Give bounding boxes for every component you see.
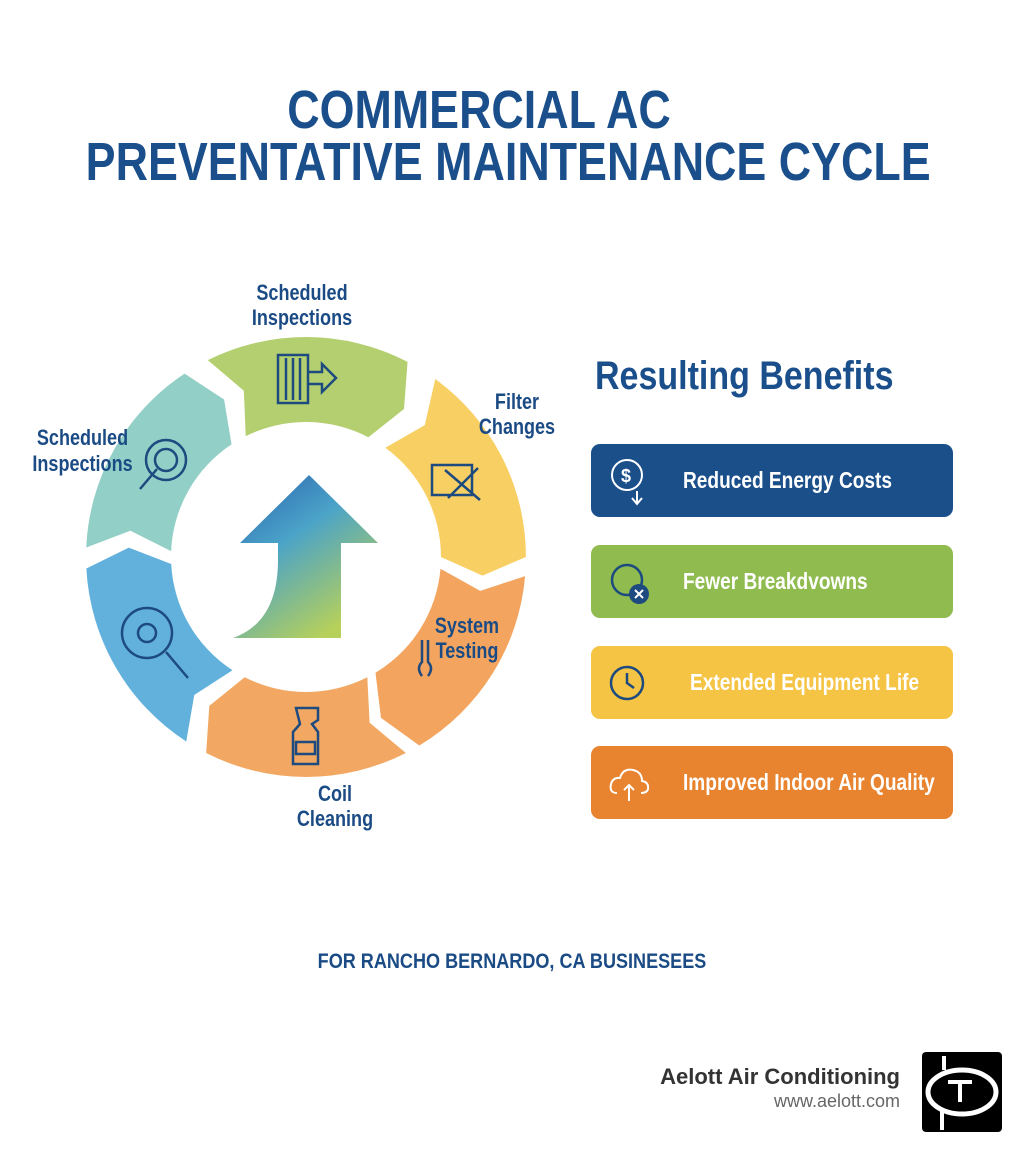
icon: wrench panel bbox=[432, 465, 480, 500]
label: top: Inspections bbox=[252, 305, 352, 330]
benefit: breakdowns: Fewer Breakdvowns bbox=[683, 568, 868, 594]
label: filter bbox=[479, 389, 555, 439]
benefit: life: Extended Equipment Life bbox=[690, 669, 919, 695]
segment: orange right bbox=[353, 535, 547, 758]
label: left: Scheduled bbox=[37, 425, 128, 450]
benefit: air quality bbox=[591, 746, 953, 819]
title bbox=[86, 80, 931, 192]
label: filter: Changes bbox=[479, 414, 555, 439]
segment: orange bottom bbox=[206, 674, 407, 779]
icon: filter bbox=[278, 355, 336, 403]
segment: yellow bbox=[368, 368, 546, 591]
label: top bbox=[252, 280, 352, 330]
benefit: energy bbox=[591, 444, 953, 517]
center arrow bbox=[233, 475, 378, 638]
benefit: breakdowns bbox=[591, 545, 953, 618]
logo bbox=[922, 1052, 1002, 1132]
icon: magnifier gear bbox=[122, 608, 188, 678]
benefit: air quality: Improved Indoor Air Quality bbox=[683, 769, 935, 795]
title: COMMERCIAL AC bbox=[287, 80, 671, 140]
company name: Aelott Air Conditioning bbox=[660, 1064, 900, 1089]
label: left bbox=[32, 425, 133, 476]
label: testing bbox=[435, 613, 499, 663]
label: filter: Filter bbox=[495, 389, 539, 414]
label: testing: Testing bbox=[436, 638, 498, 663]
label: left: Inspections bbox=[32, 451, 133, 476]
benefit: life bbox=[591, 646, 953, 719]
icon: spray bottle bbox=[293, 708, 318, 764]
label: top: Scheduled bbox=[256, 280, 348, 305]
icon: thermometer bbox=[419, 640, 431, 676]
title: PREVENTATIVE MAINTENANCE CYCLE bbox=[86, 132, 931, 192]
label: coil: Coil bbox=[318, 781, 352, 806]
label: coil: Cleaning bbox=[297, 806, 373, 831]
footer tagline: FOR RANCHO BERNARDO, CA BUSINESEES bbox=[318, 950, 706, 973]
segment: blue bbox=[67, 530, 252, 754]
company name: www.aelott.com bbox=[774, 1091, 900, 1111]
segment: teal bbox=[64, 362, 252, 586]
label: testing: System bbox=[435, 613, 499, 638]
icon: gear search bbox=[140, 440, 186, 489]
segment: green bbox=[206, 334, 408, 440]
benefits heading: Resulting Benefits bbox=[595, 354, 893, 398]
benefit: energy: Reduced Energy Costs bbox=[683, 467, 892, 493]
label: coil bbox=[297, 781, 373, 831]
benefit: energy: $ bbox=[621, 466, 631, 486]
company name bbox=[660, 1064, 900, 1111]
